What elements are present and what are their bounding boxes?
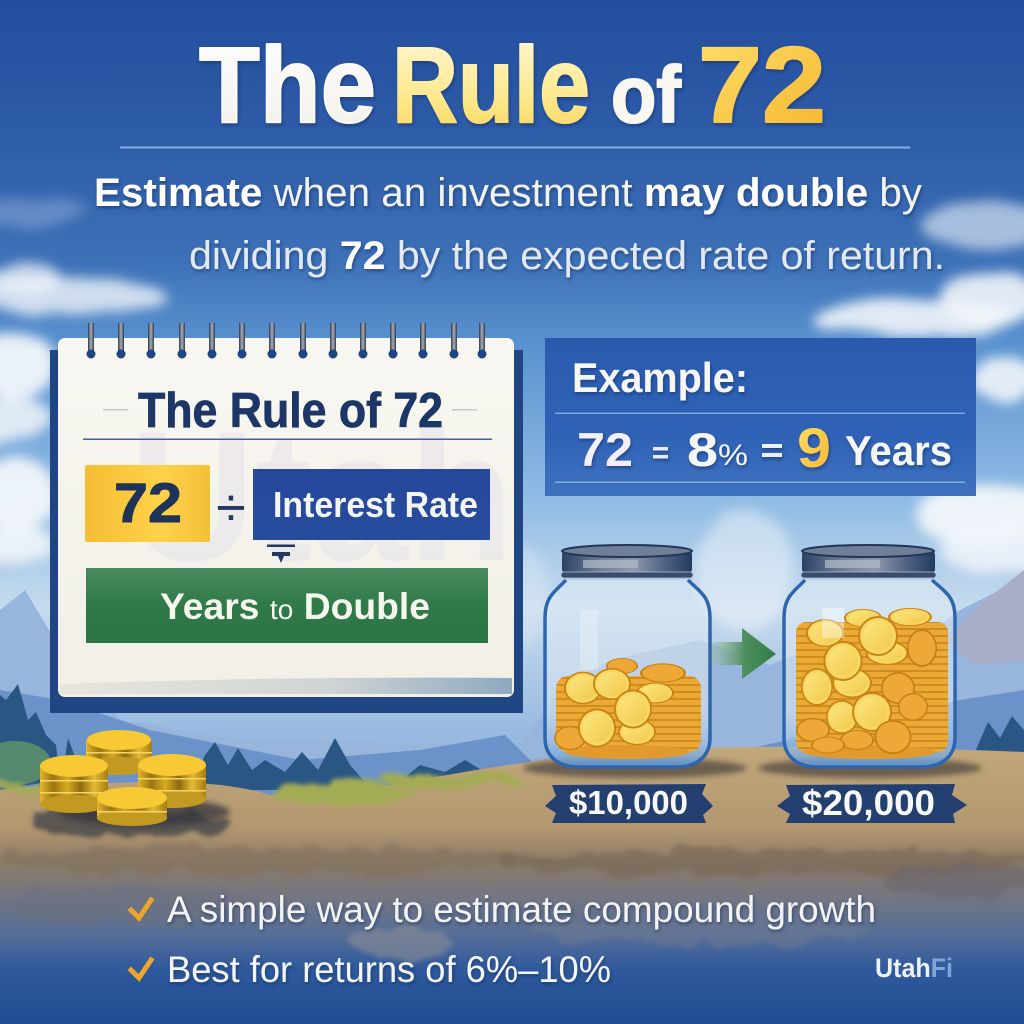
clouds xyxy=(0,198,1024,650)
jar lid xyxy=(801,545,936,578)
card watermark: Utah xyxy=(130,394,514,600)
icon: gold coin stacks xyxy=(40,730,206,826)
interest rate box xyxy=(253,469,490,540)
grass patches xyxy=(0,772,520,805)
years to double box xyxy=(86,568,488,643)
title xyxy=(199,24,826,145)
jar: $10,000 xyxy=(545,545,710,767)
panel: example: Example: xyxy=(572,354,748,401)
equals sign xyxy=(267,544,295,563)
yellow 72 box xyxy=(85,465,210,542)
yellow 72 box: 72 xyxy=(114,471,182,534)
jar lid xyxy=(561,545,693,578)
coins xyxy=(796,608,948,759)
panel: calendar formula card xyxy=(50,323,523,713)
distant mountains xyxy=(0,570,1024,780)
title: The xyxy=(199,24,376,145)
panel: example: 9 xyxy=(797,416,831,479)
jar shadows xyxy=(523,758,982,778)
ground xyxy=(0,747,1024,1024)
coin stack shadow xyxy=(60,798,230,826)
divide sign: ÷ xyxy=(216,478,246,538)
bushes left xyxy=(0,741,51,785)
title divider xyxy=(120,146,910,148)
notebook rings xyxy=(86,323,486,358)
years to double box: Years to Double xyxy=(160,586,430,627)
title: 72 xyxy=(698,24,826,145)
title: Rule xyxy=(392,24,590,145)
panel: example: % xyxy=(718,439,748,472)
ground shading blotches xyxy=(0,806,1024,958)
subtitle: dividing 72 by the expected rate of return. xyxy=(189,234,945,278)
panel: example: 8 xyxy=(687,423,718,476)
subtitle: Estimate when an investment may double by xyxy=(94,171,922,215)
panel: example: 72 xyxy=(577,423,633,476)
interest rate box: Interest Rate xyxy=(273,484,478,525)
panel: example xyxy=(545,338,976,496)
coins xyxy=(554,658,701,759)
title: of xyxy=(611,50,681,139)
tree line xyxy=(0,684,1024,790)
jar: $20,000 xyxy=(784,545,955,767)
label: $20,000: $20,000 xyxy=(802,784,935,823)
bullet: best returns: Best for returns of 6%–10% xyxy=(167,949,611,990)
page curl xyxy=(60,678,512,694)
panel: example: Years xyxy=(845,427,952,474)
mountain peak right xyxy=(945,570,1024,665)
subtitle xyxy=(94,171,945,278)
label: $10,000 xyxy=(545,784,713,823)
label: $20,000 xyxy=(777,784,967,823)
arrow xyxy=(712,628,776,679)
label: $10,000: $10,000 xyxy=(569,784,688,821)
card title: The Rule of 72 xyxy=(138,384,443,438)
bullet: compound growth: A simple way to estimate compound growth xyxy=(167,889,876,930)
near mountains xyxy=(0,690,1024,800)
logo: UtahFi xyxy=(875,953,953,983)
